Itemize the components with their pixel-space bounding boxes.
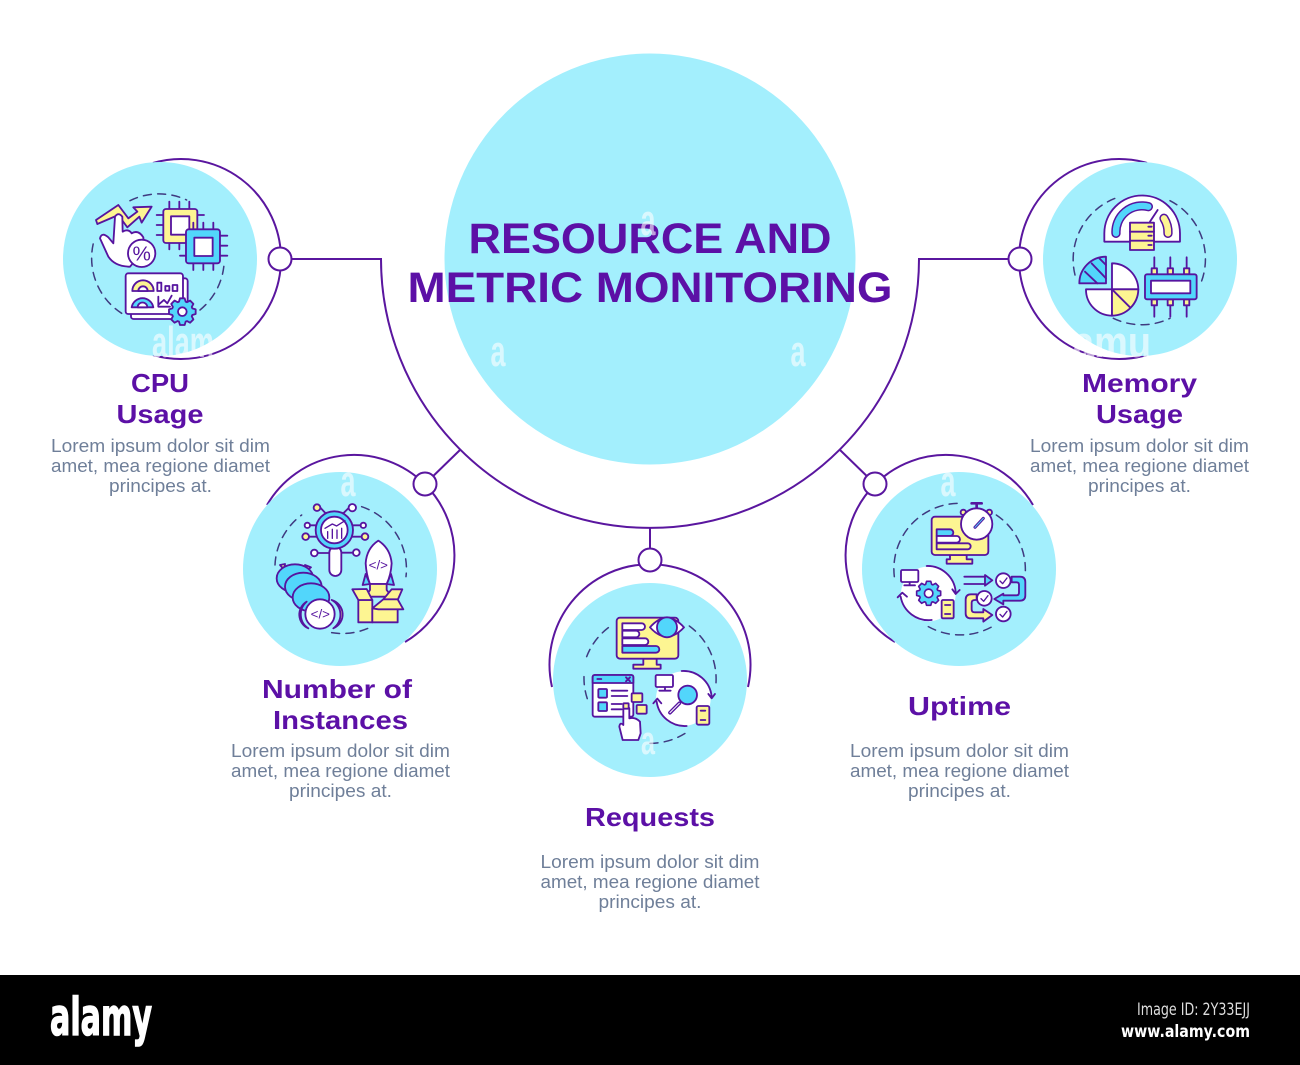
text: requests: principes at. [598, 892, 702, 912]
text: cpu usage: amet, mea regione diamet [51, 456, 270, 476]
footer band [0, 975, 1300, 1065]
text: requests [540, 852, 760, 912]
panel: uptime [846, 455, 1069, 801]
icon: requests [584, 617, 716, 743]
panel: number of instances [231, 455, 454, 801]
icon: cpu usage: % [132, 243, 151, 266]
central circle with title [408, 54, 892, 464]
connector arc [280, 259, 1019, 560]
text: uptime: amet, mea regione diamet [850, 761, 1069, 781]
panel: memory usage [1008, 159, 1249, 496]
title: METRIC MONITORING [408, 264, 892, 312]
icon: uptime [894, 503, 1025, 635]
watermarks: a [790, 327, 806, 376]
text: cpu usage: principes at. [109, 476, 212, 496]
heading: memory usage [1082, 368, 1198, 429]
text: memory usage: Lorem ipsum dolor sit dim [1030, 436, 1249, 456]
panel: cpu usage [51, 159, 292, 496]
heading: memory usage: Usage [1096, 399, 1183, 429]
icon: number of instances [275, 504, 406, 634]
text: number of instances: amet, mea regione diamet [231, 761, 450, 781]
text: number of instances: principes at. [289, 781, 392, 801]
heading: number of instances [262, 674, 412, 735]
image id [1121, 1000, 1250, 1042]
heading: requests: Requests [585, 802, 715, 832]
image id: www.alamy.com [1121, 1022, 1250, 1042]
alamy logo: alamy [50, 988, 152, 1048]
text: memory usage: amet, mea regione diamet [1030, 456, 1249, 476]
heading: cpu usage: Usage [116, 399, 204, 429]
watermarks: a [940, 457, 956, 506]
text: uptime [850, 741, 1069, 801]
watermarks: alam [152, 318, 214, 367]
heading: cpu usage [116, 368, 204, 429]
watermarks: a [640, 196, 656, 245]
heading: cpu usage: CPU [131, 368, 189, 398]
title [408, 215, 892, 312]
heading: number of instances: Number of [262, 674, 412, 704]
text: memory usage [1030, 436, 1249, 496]
icon: number of instances: </> [369, 557, 388, 572]
watermarks [152, 196, 1151, 763]
heading: uptime: Uptime [908, 691, 1011, 721]
watermarks: amu [1073, 318, 1151, 367]
watermarks: a [490, 327, 506, 376]
panel: requests [540, 548, 760, 912]
text: cpu usage [51, 436, 270, 496]
title: RESOURCE AND [468, 215, 832, 263]
text: requests: Lorem ipsum dolor sit dim [540, 852, 760, 872]
watermarks: a [340, 457, 356, 506]
image id: Image ID: 2Y33EJJ [1137, 1000, 1250, 1020]
text: uptime: principes at. [908, 781, 1011, 801]
text: memory usage: principes at. [1088, 476, 1191, 496]
icon: number of instances: </> [311, 607, 330, 622]
text: number of instances: Lorem ipsum dolor sit dim [231, 741, 450, 761]
text: cpu usage: Lorem ipsum dolor sit dim [51, 436, 270, 456]
icon: cpu usage [92, 194, 227, 325]
heading: number of instances: Instances [273, 705, 408, 735]
heading: memory usage: Memory [1082, 368, 1198, 398]
text: requests: amet, mea regione diamet [540, 872, 760, 892]
icon: memory usage [1073, 195, 1205, 325]
text: number of instances [231, 741, 450, 801]
text: uptime: Lorem ipsum dolor sit dim [850, 741, 1069, 761]
watermarks: a [641, 719, 655, 763]
